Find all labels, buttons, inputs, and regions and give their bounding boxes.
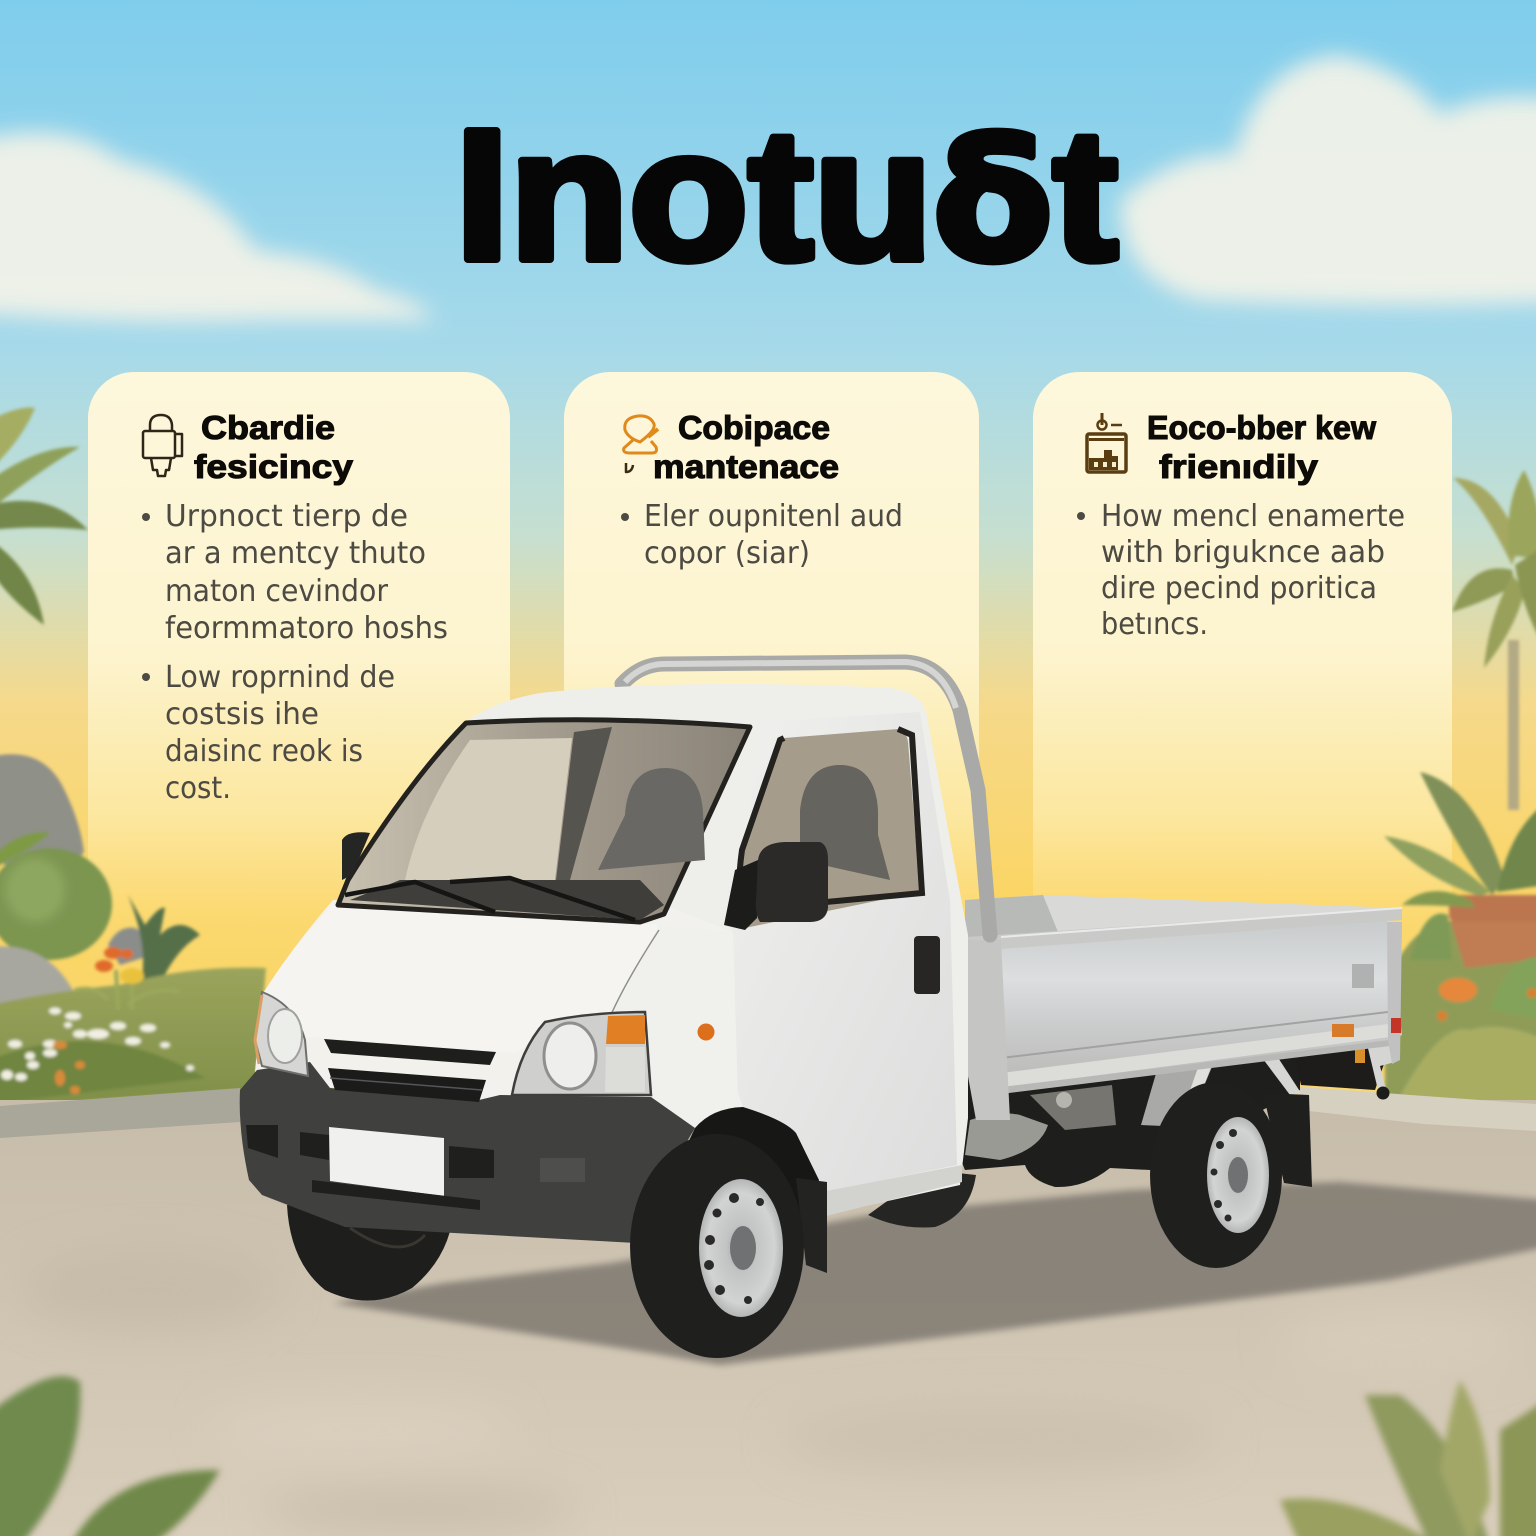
rear post [1387,922,1402,1064]
panel: eco friendly: frienıdily [1159,448,1319,485]
underside chassis [960,1032,1395,1187]
panel: eco friendly [1033,372,1452,992]
bullets [1077,499,1405,642]
far front wheel [287,1205,454,1301]
right garden [1384,772,1536,1110]
foreground plant right [1280,1380,1536,1536]
right headlamp [512,1012,651,1095]
bullets: ar a mentcy thuto [165,536,426,571]
rear wheel [1150,1082,1282,1268]
panel: maintenance: mantenace [653,448,839,485]
bullets: copor (siar) [644,536,810,571]
bed side [976,920,1402,1088]
bullets: maton cevindor [165,574,389,609]
mudflap [1263,1093,1312,1187]
cab door [730,712,957,1192]
rear fender [1141,1062,1214,1127]
front body base [255,900,738,1130]
hood [262,905,659,1053]
bullets: with briguknce aab [1101,535,1385,570]
indicator [698,1024,714,1040]
truck shadow [333,1182,1536,1365]
bullets: dire pecind poritica [1101,571,1377,606]
bed top rail [967,908,1402,949]
bullets: betıncs. [1101,607,1208,642]
icon: plug [143,415,182,476]
curbs [0,1088,240,1138]
icon: crane box [1087,413,1126,472]
bullets: feormmatoro hoshs [165,611,448,646]
roll bar [622,662,990,935]
palm left [0,408,88,625]
bullets: Eler oupnitenl aud [644,499,903,534]
background sky [0,0,1536,1140]
upper grille [324,1039,496,1065]
windshield [338,720,750,922]
left headlamp [255,992,308,1076]
foreground plant left [0,1376,220,1536]
title: Inotuδt [455,92,1118,299]
hood line [605,930,659,1029]
panel: maintenance [564,372,979,992]
bullets [621,499,903,571]
side window [739,729,920,928]
heading: Eoco-bber kew [1147,409,1376,446]
lower grille [328,1068,486,1102]
license plate [329,1127,444,1196]
bed front pillar [965,940,1010,1120]
heading: Cobipace [678,409,830,446]
pavement [0,1100,1536,1536]
panel: efficiency: fesicincy [194,448,354,485]
wheel arch and front wheel [630,1107,827,1358]
bullets: cost. [165,771,231,806]
wipers [345,878,635,920]
hidden rear wheel [868,1170,976,1228]
mirrors [342,832,370,880]
grille panel [305,1037,517,1080]
bullets: costsis ihe [165,697,319,732]
rear underside [1292,1032,1395,1090]
panel: efficiency [88,372,510,992]
bullets: Urpnoct tierp de [165,499,408,534]
bullets: How mencl enamerte [1101,499,1405,534]
bumper [240,1062,695,1243]
bullets [142,499,448,806]
front fender [605,925,743,1128]
clouds [0,55,1536,321]
bullets: Low roprnind de [165,660,395,695]
left garden [0,754,266,1108]
bullets: daisinc reok is [165,734,363,769]
truck [240,662,1402,1358]
door handle [914,936,940,994]
icon: person pin [624,416,658,472]
heading: Cbardie [201,409,335,446]
lower intakes [246,1125,494,1178]
cab roof and side [462,684,968,1215]
palm right [1452,470,1536,810]
bed inner [965,895,1402,945]
